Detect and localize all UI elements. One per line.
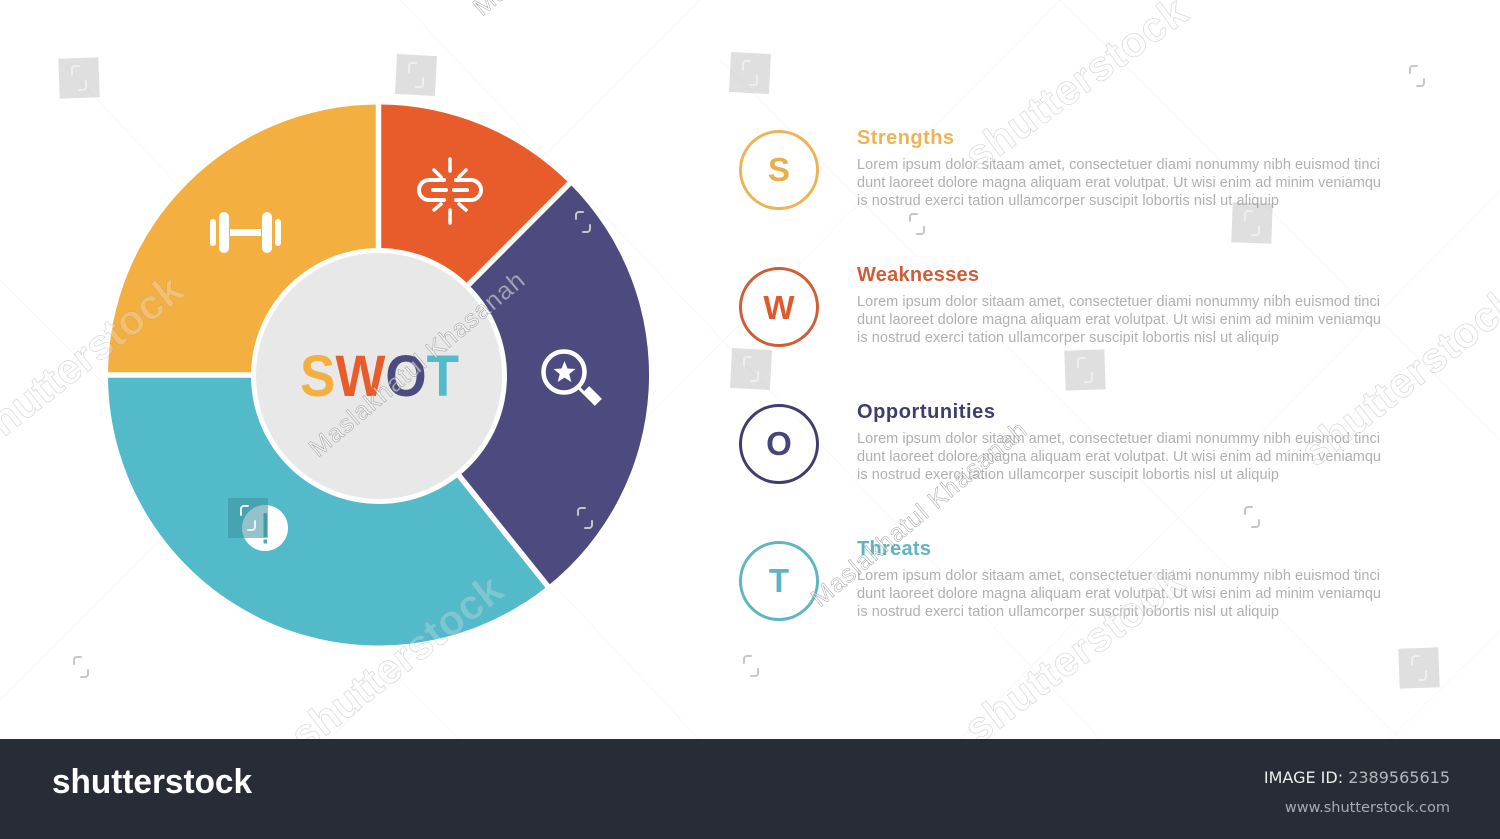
segment: opportunities: [378, 184, 649, 586]
heading Threats: Threats: [857, 538, 931, 560]
watermark text: shutterstock: [282, 565, 512, 759]
heading Weaknesses: Weaknesses: [857, 264, 979, 286]
center title SWOT: SWOT: [300, 344, 459, 409]
website url: www.shutterstock.com: [1285, 800, 1450, 816]
icon: broken chain: [419, 159, 481, 223]
watermark text: shutterstock: [955, 557, 1193, 752]
image id: IMAGE ID: 2389565615: [1264, 768, 1450, 787]
segment: weaknesses: [378, 104, 570, 375]
body Threats: dunt laoreet dolore magna aliquam erat volutpat. Ut wisi enim ad minim veniamqu: [857, 586, 1381, 602]
badge T: [740, 542, 818, 620]
body Opportunities: is nostrud exerci tation ullamcorper suscipit lobortis nisl ut aliquip: [857, 467, 1279, 483]
body Opportunities: [857, 431, 1381, 483]
icon: dumbbell: [210, 212, 281, 253]
body Threats: Lorem ipsum dolor sitaam amet, consectetuer diami nonummy nibh euismod tinci: [857, 568, 1380, 584]
center hub: [251, 248, 507, 504]
body Weaknesses: [857, 294, 1381, 346]
segment: strengths: [108, 104, 378, 375]
watermark stamps: [58, 52, 1440, 689]
body Weaknesses: dunt laoreet dolore magna aliquam erat volutpat. Ut wisi enim ad minim veniamqu: [857, 312, 1381, 328]
badge O: [740, 406, 818, 482]
badge S: [740, 132, 818, 208]
body Weaknesses: is nostrud exerci tation ullamcorper suscipit lobortis nisl ut aliquip: [857, 330, 1279, 346]
badge W: W: [763, 289, 795, 326]
badge O: O: [766, 425, 792, 462]
heading Opportunities: Opportunities: [857, 401, 995, 423]
badge T: T: [769, 562, 789, 599]
body Threats: [857, 568, 1381, 620]
body Weaknesses: Lorem ipsum dolor sitaam amet, consectetuer diami nonummy nibh euismod tinci: [857, 294, 1380, 310]
badge S: S: [768, 151, 790, 188]
body Opportunities: Lorem ipsum dolor sitaam amet, consectetuer diami nonummy nibh euismod tinci: [857, 431, 1380, 447]
icon: magnifier with star: [544, 352, 602, 406]
body Opportunities: dunt laoreet dolore magna aliquam erat volutpat. Ut wisi enim ad minim veniamqu: [857, 449, 1381, 465]
item: Threats: [740, 538, 1381, 620]
body Strengths: Lorem ipsum dolor sitaam amet, consectetuer diami nonummy nibh euismod tinci: [857, 157, 1380, 173]
item: Opportunities: [740, 401, 1381, 483]
icon: warning circle: [242, 505, 288, 551]
segment: threats: [108, 375, 548, 645]
footer bar: [0, 739, 1500, 839]
item: Strengths: [740, 127, 1381, 209]
watermark text: Maslakhatul Khasanah: [806, 416, 1032, 613]
footer logo: shutterstock: [52, 763, 252, 801]
watermark text: Maslakhatul Khasanah: [304, 266, 530, 463]
badge W: [740, 268, 818, 346]
body Threats: is nostrud exerci tation ullamcorper suscipit lobortis nisl ut aliquip: [857, 604, 1279, 620]
body Strengths: [857, 157, 1381, 209]
item: Weaknesses: [740, 264, 1381, 346]
body Strengths: dunt laoreet dolore magna aliquam erat volutpat. Ut wisi enim ad minim veniamqu: [857, 175, 1381, 191]
donut chart: [104, 100, 649, 645]
heading Strengths: Strengths: [857, 127, 954, 149]
body Strengths: is nostrud exerci tation ullamcorper suscipit lobortis nisl ut aliquip: [857, 193, 1279, 209]
